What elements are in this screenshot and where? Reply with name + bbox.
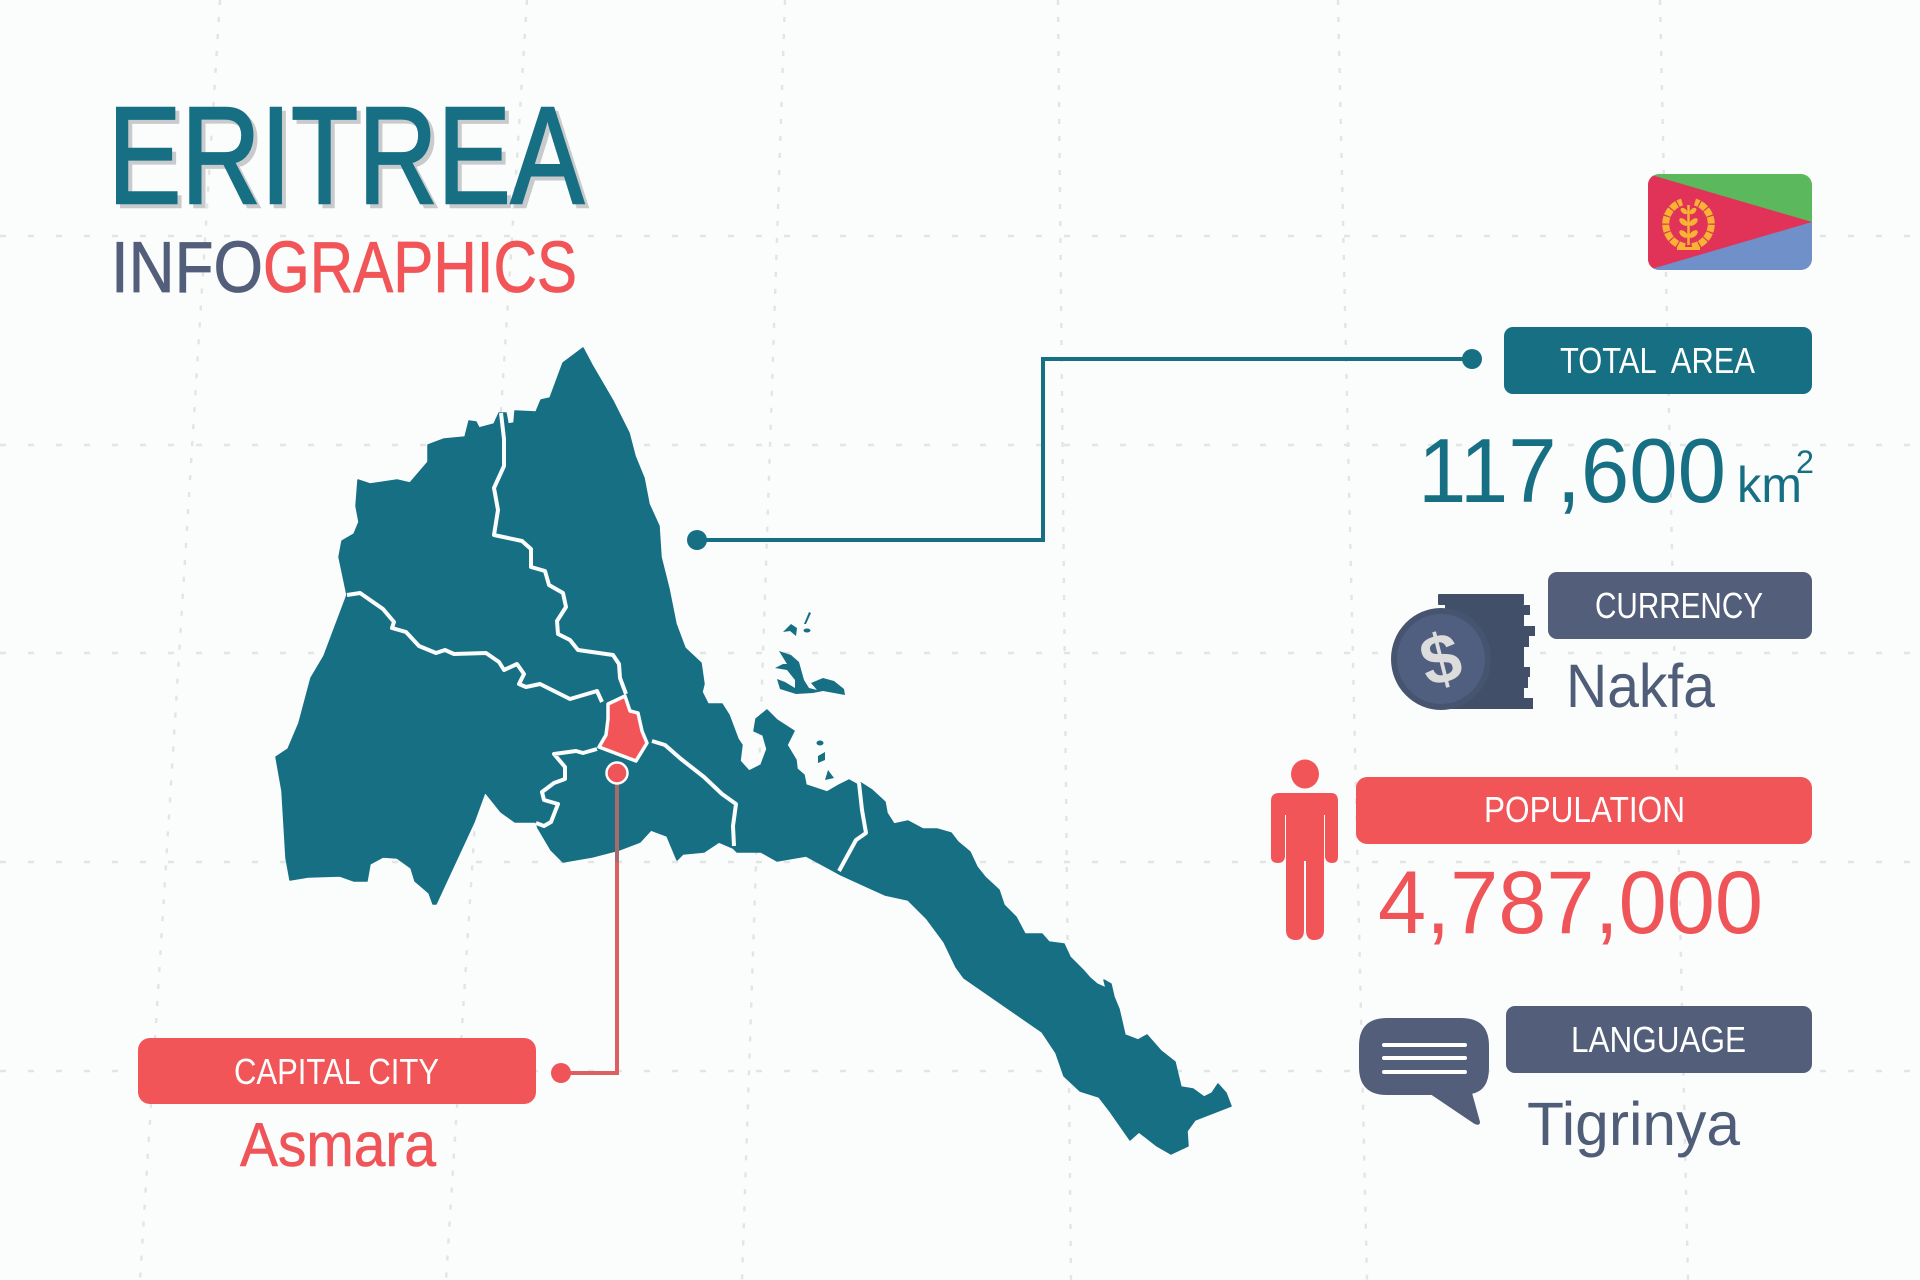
map: mainland: [276, 348, 1231, 1154]
currency value: Nakfa: [1566, 652, 1715, 720]
language value: Tigrinya: [1527, 1090, 1740, 1158]
icon: speech bubble: [1360, 1019, 1488, 1124]
icon: coins: $: [1412, 616, 1469, 702]
map of Eritrea: [276, 348, 1231, 1154]
icon: flag of Eritrea: [1648, 174, 1812, 270]
language label: LANGUAGE: [1571, 1019, 1746, 1060]
map: islands: [775, 612, 845, 780]
total area value: km: [1737, 457, 1802, 513]
language label: [1506, 1006, 1812, 1073]
currency label: CURRENCY: [1595, 585, 1763, 626]
population label: [1356, 777, 1812, 844]
subtitle: INFOGRAPHICS: GRAPHICS: [263, 228, 577, 308]
capital city value: Asmara: [240, 1111, 436, 1180]
icon: coins: [1391, 594, 1535, 710]
total area label: TOTAL AREA: [1560, 340, 1755, 381]
currency label: [1548, 572, 1812, 639]
capital city label: CAPITAL CITY: [234, 1051, 439, 1092]
title: ERITREA: ERITREA: [108, 79, 584, 233]
population label: POPULATION: [1484, 789, 1685, 830]
icon: person: [1271, 760, 1338, 940]
total area label: [1504, 327, 1812, 394]
capital city label: [138, 1038, 536, 1104]
leader line: capital city: [551, 762, 628, 1083]
population value: 4,787,000: [1378, 852, 1763, 952]
subtitle: INFOGRAPHICS: [111, 228, 577, 308]
map: region borders: [347, 413, 866, 871]
leader line: total area: [687, 349, 1482, 550]
map: capital region highlight: [599, 696, 647, 761]
total area value: 2: [1796, 444, 1814, 480]
total area value: 117,600: [1418, 421, 1726, 522]
subtitle: INFOGRAPHICS: INFO: [111, 228, 263, 308]
